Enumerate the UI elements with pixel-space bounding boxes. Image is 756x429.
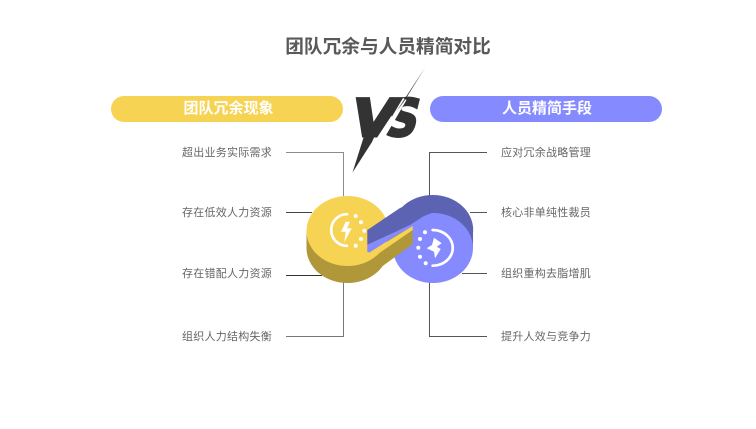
- left label 1: 超出业务实际需求: [182, 147, 272, 159]
- icon: lightning gauge left: [331, 214, 366, 248]
- left heading pill: [111, 96, 343, 122]
- right label 3: 组织重构去脂增肌: [501, 268, 591, 280]
- slash: [352, 67, 426, 172]
- right label 1: 应对冗余战略管理: [501, 147, 591, 159]
- icon: lightning gauge right: [416, 230, 453, 266]
- right heading pill: 人员精简手段: [502, 100, 592, 117]
- yellow loop: [306, 196, 432, 283]
- purple loop: [392, 195, 473, 283]
- title: 团队冗余与人员精简对比: [285, 36, 491, 57]
- VS emblem: S: [380, 89, 427, 149]
- left label 3: 存在错配人力资源: [182, 268, 272, 280]
- right heading pill: [430, 96, 662, 122]
- right label 4: 提升人效与竞争力: [501, 331, 591, 343]
- left label 4: 组织人力结构失衡: [182, 331, 272, 343]
- left heading pill: 团队冗余现象: [183, 100, 274, 117]
- purple arm strip: [367, 225, 411, 252]
- right label 2: 核心非单纯性裁员: [501, 207, 591, 219]
- purple arm face: [367, 198, 432, 245]
- left label 2: 存在低效人力资源: [182, 207, 272, 219]
- VS letters: V: [345, 89, 404, 149]
